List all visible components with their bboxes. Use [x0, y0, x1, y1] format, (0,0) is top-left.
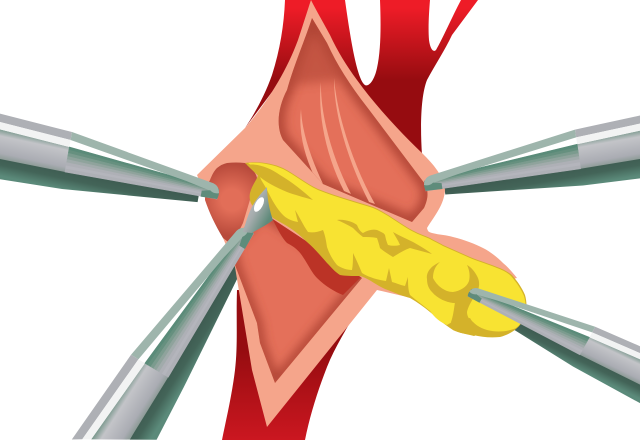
artery upper branches	[245, 0, 478, 155]
upper right forceps tapered tip	[420, 130, 581, 196]
pink membrane	[197, 0, 517, 427]
forceps spear tip	[243, 187, 273, 233]
crescent around round lobe	[427, 262, 479, 303]
left forceps handle	[0, 114, 72, 172]
dark jaw of lower left forceps	[130, 266, 237, 440]
lower right forceps	[467, 288, 640, 384]
lower muscle	[235, 219, 362, 383]
fat bright surface	[248, 163, 526, 331]
upper right forceps	[424, 116, 640, 192]
fat lobes at right end	[426, 262, 480, 336]
vertical crease between lobes	[451, 298, 478, 336]
fat central vein fold	[337, 220, 432, 257]
lower left forceps handle	[72, 353, 169, 440]
upper right forceps handle	[575, 116, 640, 169]
artery lower trunk	[222, 290, 358, 440]
lower left forceps tapered tip	[131, 228, 254, 378]
lower right forceps tapered tip	[467, 288, 596, 355]
left muscle	[205, 162, 257, 245]
spear highlight	[254, 197, 264, 212]
dark jaw of lower right forceps	[514, 324, 640, 404]
deep red shadow under fat	[272, 219, 361, 295]
lower right forceps handle	[580, 326, 640, 384]
fat body base	[245, 162, 526, 337]
fat top-left fold	[247, 165, 313, 200]
muscle fibre stripes	[300, 78, 375, 204]
dark jaw of upper right forceps	[444, 159, 640, 194]
left forceps tapered tip	[65, 132, 224, 204]
lower left forceps	[72, 228, 254, 440]
dark jaw of left forceps	[0, 159, 199, 202]
left forceps	[0, 114, 219, 200]
upper muscle	[278, 18, 428, 222]
